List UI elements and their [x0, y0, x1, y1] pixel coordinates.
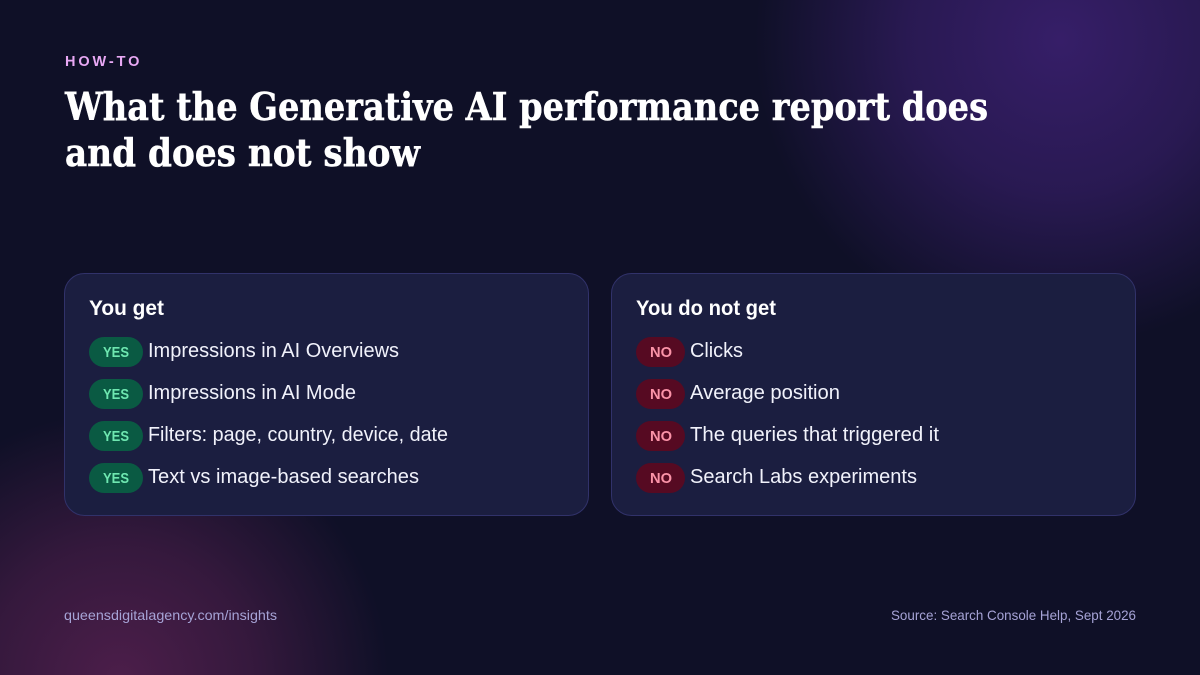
eyebrow: how-to: HOW-TO — [65, 54, 142, 70]
row: the queries that triggered it: NO — [650, 428, 672, 445]
panel: you get — [64, 274, 588, 516]
row: impressions in AI Mode: Impressions in AI Mode — [148, 382, 356, 404]
row: clicks: Clicks — [690, 340, 743, 362]
panel: you do not get — [612, 274, 1136, 516]
row: average position — [636, 379, 840, 409]
footer: site url: queensdigitalagency.com/insights — [64, 607, 277, 623]
row: text vs image-based searches: Text vs image-based searches — [148, 466, 419, 488]
row: text vs image-based searches: YES — [103, 470, 129, 487]
row: search labs experiments — [636, 463, 917, 493]
footer: source: Source: Search Console Help, Sept 2026 — [891, 607, 1136, 623]
row: average position: NO — [650, 386, 672, 403]
title: and does not show — [65, 130, 421, 175]
row: filters: YES — [103, 428, 129, 445]
row: impressions in AI Overviews: YES — [103, 344, 129, 361]
row: impressions in AI Overviews — [89, 337, 399, 367]
row: impressions in AI Overviews: Impressions in AI Overviews — [148, 340, 399, 362]
row: the queries that triggered it — [636, 421, 939, 451]
title — [64, 84, 988, 175]
row: impressions in AI Mode — [89, 379, 356, 409]
row: search labs experiments: NO — [650, 470, 672, 487]
row: clicks: NO — [650, 344, 672, 361]
row: impressions in AI Mode: YES — [103, 386, 129, 403]
row: filters: Filters: page, country, device, date — [148, 424, 448, 446]
heading: you get: You get — [89, 297, 164, 320]
row: search labs experiments: Search Labs experiments — [690, 466, 917, 488]
row: filters — [89, 421, 448, 451]
row: text vs image-based searches — [89, 463, 419, 493]
row: the queries that triggered it: The queries that triggered it — [690, 424, 939, 446]
heading: you do not get: You do not get — [636, 297, 776, 320]
title: What the Generative AI performance report does — [64, 84, 988, 129]
row: average position: Average position — [690, 382, 840, 404]
row: clicks — [636, 337, 743, 367]
